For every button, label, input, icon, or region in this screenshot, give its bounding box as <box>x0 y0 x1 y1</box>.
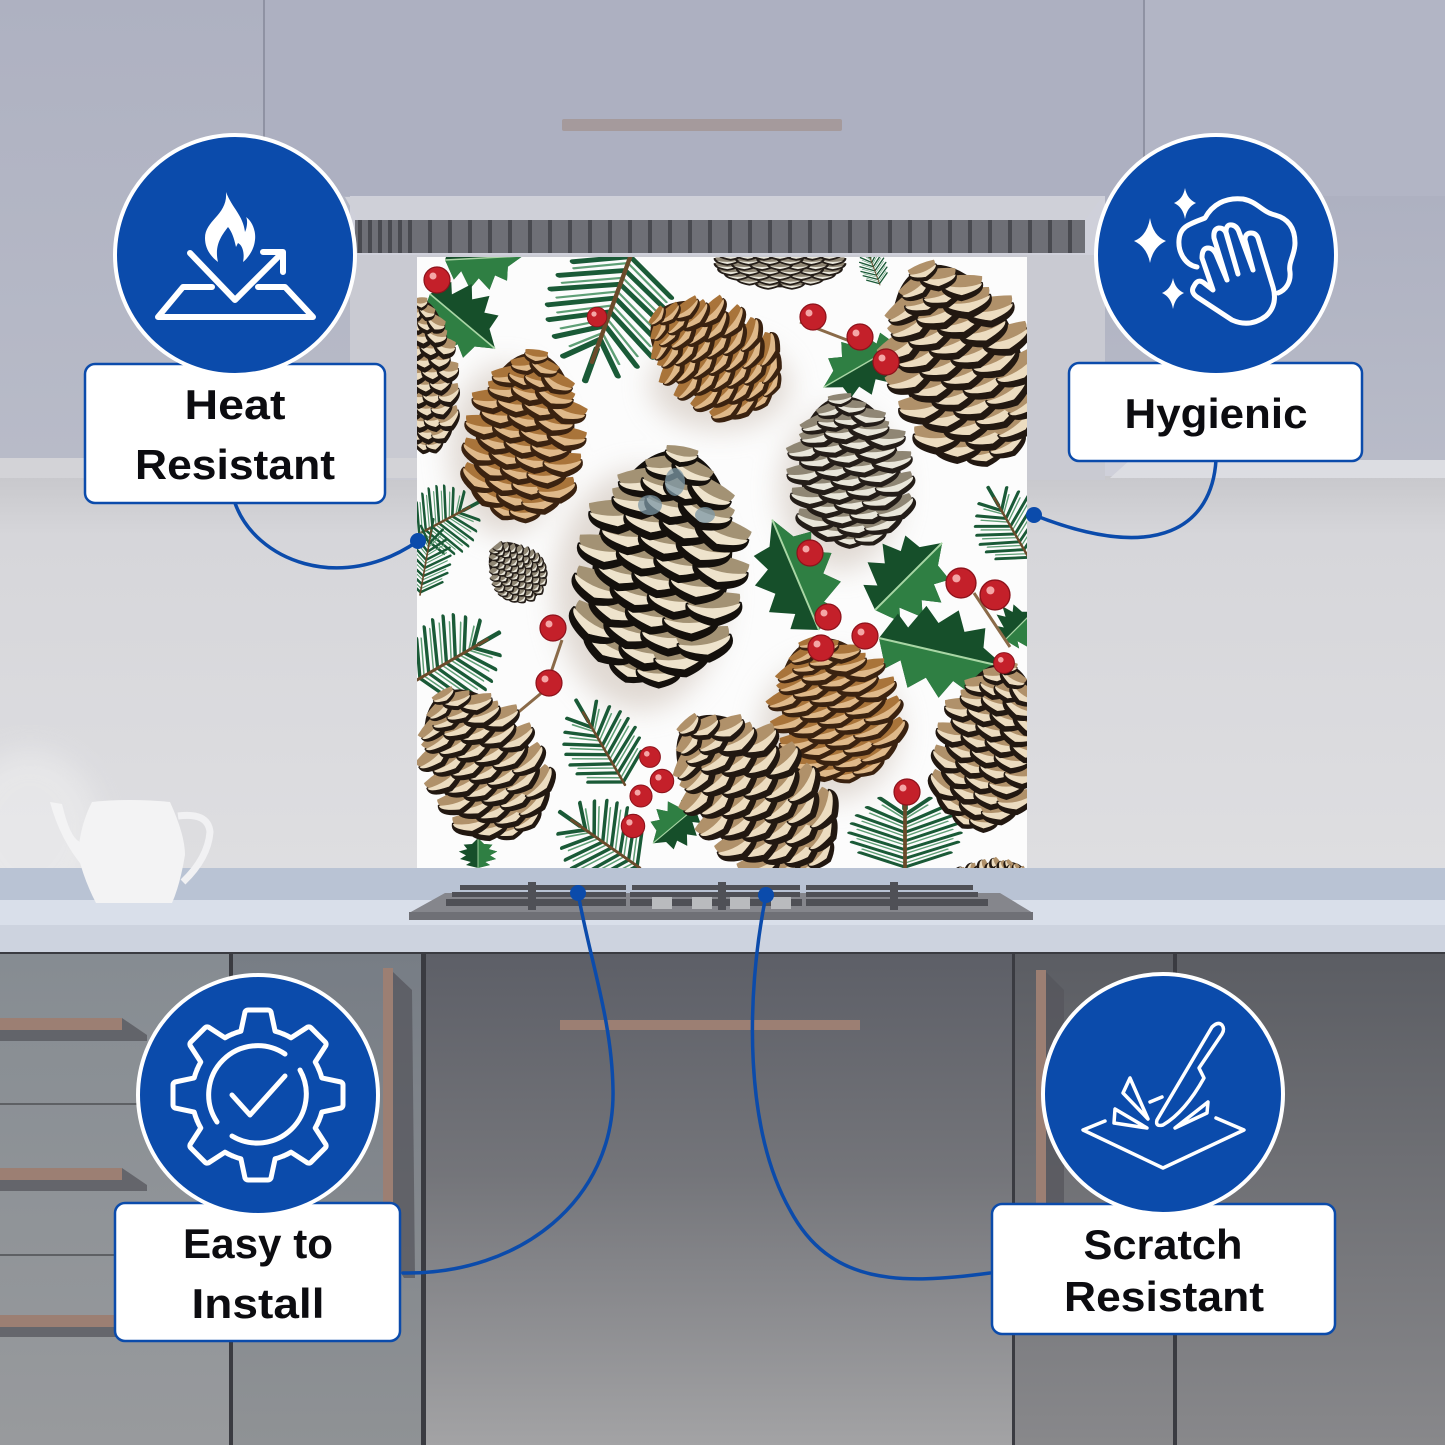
callout: easy to install: Install <box>192 1280 324 1327</box>
callout: heat resistant <box>85 135 426 568</box>
splashback panel with pine cones <box>417 257 1027 868</box>
heading: Easy to <box>183 1220 333 1267</box>
icon: gear with check <box>173 1010 343 1180</box>
label box <box>1069 363 1362 461</box>
extractor hood <box>345 197 1102 220</box>
circle badge <box>1043 974 1283 1214</box>
pine cones <box>385 228 1076 920</box>
label box <box>992 1204 1335 1334</box>
label box <box>85 364 385 503</box>
callout: easy to install <box>115 885 613 1341</box>
under-cabinet strips <box>0 458 420 478</box>
callout: scratch resistant <box>752 887 1335 1334</box>
gas hob <box>409 882 1033 920</box>
berry stems <box>515 322 1010 715</box>
upper centre cabinet <box>265 0 1143 196</box>
upper right cabinet <box>1105 196 1445 460</box>
heading: Scratch <box>1084 1221 1242 1268</box>
red berries <box>424 267 1014 838</box>
holly leaves <box>406 224 1051 868</box>
connector <box>1034 460 1216 537</box>
cabinet handles <box>0 968 1046 1327</box>
heading: Heat <box>184 381 286 428</box>
connector <box>403 893 613 1273</box>
callout: scratch resistant: Resistant <box>1064 1273 1264 1320</box>
circle badge <box>1096 135 1336 375</box>
blue-grey tints on central cone <box>638 468 715 523</box>
upper cabinet handle <box>562 119 842 131</box>
callout: heat resistant: Resistant <box>135 441 335 488</box>
wall <box>0 476 1445 870</box>
label box <box>115 1203 400 1341</box>
worktop <box>0 868 1445 902</box>
connector <box>752 895 990 1279</box>
pine sprigs <box>395 230 1060 902</box>
circle badge <box>115 135 355 375</box>
heading: Hygienic <box>1124 390 1308 437</box>
callout: hygienic <box>1026 135 1362 537</box>
icon: flame over surface <box>158 192 313 317</box>
handle shadows <box>0 972 1064 1337</box>
circle badge <box>138 975 378 1215</box>
icon: knife on surface <box>1083 1023 1244 1168</box>
lower cabinets <box>0 952 1445 1445</box>
connector <box>235 503 418 568</box>
white jug <box>50 800 210 903</box>
upper left cabinet <box>0 0 350 458</box>
icon: hand wiping with sparkles <box>1134 188 1295 323</box>
